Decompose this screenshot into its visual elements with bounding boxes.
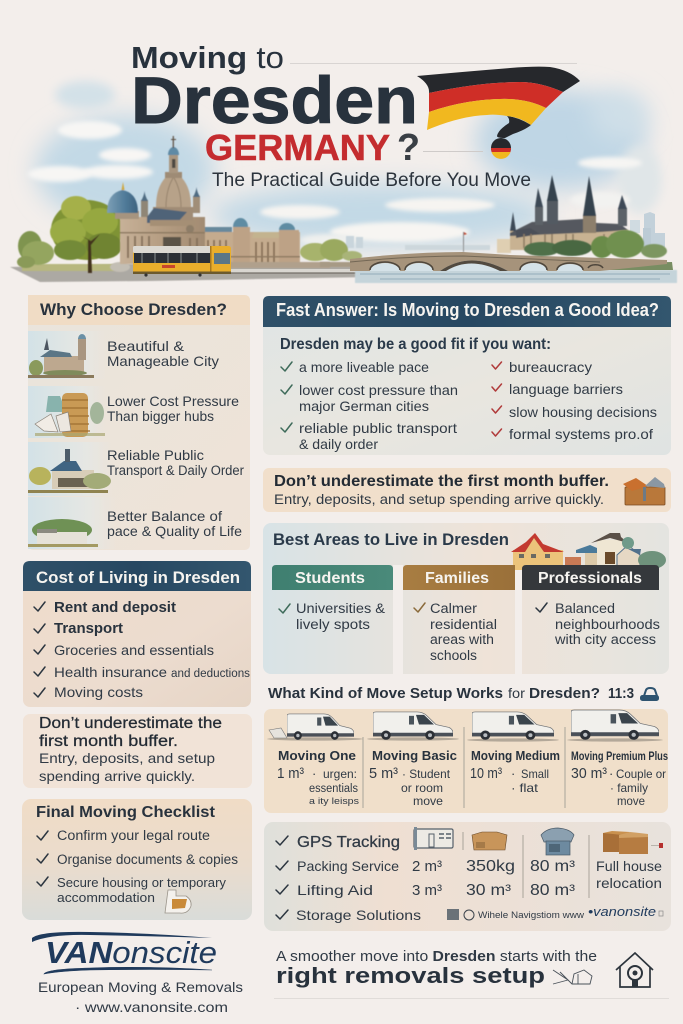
icon: car <box>640 688 659 701</box>
list: costs: and deductions <box>171 668 250 680</box>
panel header <box>23 561 251 591</box>
closing call to action: A smoother move into Dresden starts with the <box>276 949 597 965</box>
panel: why choose Dresden <box>28 295 250 550</box>
table values: volumes: 3 m³ <box>412 882 442 899</box>
callout: first month buffer (left): spending arrive quickly. <box>39 768 195 784</box>
text: item 2 <box>107 393 239 424</box>
text: families: schools <box>430 648 477 663</box>
panel: move sizes <box>264 709 668 813</box>
option: moving basic: move <box>413 794 443 808</box>
heading: move setup: 11:3 <box>608 685 634 702</box>
trees right <box>524 230 667 258</box>
option: moving medium: · flat <box>511 781 539 795</box>
option: moving premium plus: · <box>609 766 613 781</box>
logo url: · www.vanonsite.com <box>75 999 228 1015</box>
thumbnail: public transport <box>28 442 113 496</box>
subtitle: The Practical Guide Before You Move <box>212 169 531 191</box>
option: moving premium plus <box>571 751 668 808</box>
tab: families: Families <box>425 570 489 587</box>
text: item 4: Better Balance of <box>107 508 222 524</box>
footer strip with brand: •vanonsite <box>588 904 656 919</box>
list: services: Lifting Aid <box>297 882 373 898</box>
list: good fit: lower cost pressure than <box>299 382 458 398</box>
callout: first month buffer (right): Entry, deposits, and setup spending arrive quickly. <box>274 491 604 507</box>
option: moving basic: or room <box>401 781 443 795</box>
Frauenkirche and palace <box>107 136 330 268</box>
heading: move setup: for <box>508 685 525 701</box>
list: good fit: & daily order <box>299 436 378 452</box>
panel: services <box>264 822 671 931</box>
text: item 2: Lower Cost Pressure <box>107 393 239 409</box>
option: moving premium plus: · family <box>610 781 648 795</box>
hero illustration: Dresden skyline <box>10 81 677 283</box>
list: services: Storage Solutions <box>296 907 421 923</box>
text: professionals: Balanced <box>555 601 615 616</box>
bridge over the Elbe <box>350 252 667 271</box>
sky watercolor wash <box>28 81 662 247</box>
icon: folder <box>165 890 191 913</box>
list: services: Packing Service <box>297 858 399 874</box>
heading: move setup: What Kind of Move Setup Works <box>268 685 503 702</box>
text: families: Calmer <box>430 601 478 616</box>
heading: Fast Answer: Is Moving to Dresden a Good Idea? <box>276 300 659 320</box>
table values: volumes: relocation <box>596 876 662 891</box>
text: students: Universities & <box>296 601 385 616</box>
option: moving one: a ity leisps <box>309 796 359 807</box>
icon: German flag question mark <box>417 67 580 159</box>
tab: families <box>403 565 515 590</box>
text: professionals <box>536 601 660 647</box>
tab: professionals <box>522 565 659 590</box>
van 1 <box>267 714 363 741</box>
table values: volumes: Full house <box>596 859 662 874</box>
icon: trailer <box>414 827 453 850</box>
panel: cost of living <box>23 561 251 707</box>
option: moving basic <box>369 748 457 808</box>
panel: fast answer <box>263 296 671 455</box>
table values: volumes: 350kg <box>466 858 515 875</box>
title line: GERMANY: GERMANY <box>205 127 390 168</box>
list: checklist: Confirm your legal route <box>57 828 210 843</box>
list: services <box>276 834 421 923</box>
footer strip with brand <box>447 904 663 920</box>
list: good fit: a more liveable pace <box>299 359 429 375</box>
text: item 3: Reliable Public <box>107 447 204 463</box>
option: moving basic: Moving Basic <box>372 748 457 763</box>
table values: volumes <box>412 858 662 899</box>
list: challenges: language barriers <box>509 381 623 397</box>
panel header <box>263 296 671 327</box>
tab: students: Students <box>295 570 365 587</box>
decorative thin line <box>290 63 577 64</box>
list: good fit: reliable public transport <box>299 420 457 436</box>
text: students: lively spots <box>296 617 370 632</box>
heading: Final Moving Checklist <box>36 804 216 821</box>
option: moving medium: · <box>511 766 515 781</box>
icon: house <box>616 953 653 987</box>
option: moving one: Moving One <box>278 748 356 763</box>
panel header <box>28 295 250 325</box>
van 2 <box>367 712 459 741</box>
option: moving basic: · Student <box>402 767 451 781</box>
decorative thin line <box>274 998 669 999</box>
text: item 1 <box>107 338 219 369</box>
text: item 1: Beautiful & <box>107 338 185 354</box>
text: families: residential <box>430 617 497 632</box>
text: item 4 <box>107 508 242 539</box>
right distant towers <box>630 212 665 247</box>
text: students <box>279 601 385 632</box>
icon: moving box <box>623 477 665 505</box>
tram <box>133 246 231 277</box>
castle and cathedral skyline <box>497 175 628 253</box>
text: item 3 <box>107 447 244 478</box>
list: services: GPS Tracking <box>297 834 400 851</box>
option: moving medium <box>470 749 560 795</box>
text: item 2: Than bigger hubs <box>107 408 214 424</box>
list: good fit: major German cities <box>299 398 429 414</box>
logo: VANonscite <box>32 932 243 1015</box>
heading: Best Areas to Live in Dresden <box>273 530 509 549</box>
illustration: houses <box>511 533 666 570</box>
list: good fit <box>281 359 458 452</box>
thumbnail: costs <box>28 386 106 438</box>
icon: squiggle sketch <box>553 970 592 984</box>
text: item 4: pace & Quality of Life <box>107 523 242 539</box>
list: checklist <box>37 828 238 905</box>
list: challenges <box>492 359 657 442</box>
closing call to action <box>276 949 597 988</box>
column gaps <box>393 565 403 674</box>
list: costs <box>34 600 250 700</box>
text: professionals: with city access <box>554 632 656 647</box>
decorative thin line <box>423 151 483 152</box>
midground trees <box>300 232 490 267</box>
title line: Dresden: Dresden <box>131 63 418 137</box>
text: families: areas with <box>430 632 494 647</box>
list: challenges: bureaucracy <box>509 359 592 375</box>
icon: stacked boxes <box>603 831 663 854</box>
callout: first month buffer (right): Don’t underestimate the first month buffer. <box>274 473 609 490</box>
option: moving one: 1 m³ <box>277 765 304 782</box>
van 4 <box>567 710 663 742</box>
list: costs: Health insurance <box>54 664 167 680</box>
option: moving medium: Moving Medium <box>471 749 560 763</box>
list: challenges: formal systems pro.of <box>509 426 653 442</box>
question mark: ? <box>397 127 420 169</box>
option: moving medium: 10 m³ <box>470 765 502 782</box>
callout: first month buffer (left): first month buffer. <box>39 733 178 750</box>
option: moving medium: Small <box>521 767 549 781</box>
option: moving premium plus: 30 m³ <box>571 765 607 782</box>
list: checklist: accommodation <box>57 890 155 905</box>
heading: move setup <box>268 685 659 702</box>
list: costs: Moving costs <box>54 684 143 700</box>
option: moving one <box>277 748 359 807</box>
table values: volumes: 80 m³ <box>530 882 575 899</box>
title line: Moving to: Moving to <box>131 40 284 75</box>
option: moving one: urgen: <box>323 769 357 781</box>
footer strip with brand: Wihele Navigstiom www <box>478 910 585 920</box>
callout: first month buffer (right) <box>263 468 671 512</box>
icon: parcel <box>472 832 507 850</box>
table values: volumes: 2 m³ <box>412 858 442 875</box>
panel: best areas <box>263 523 669 674</box>
closing call to action: right removals setup <box>276 963 545 988</box>
list: costs: Groceries and essentials <box>54 642 214 658</box>
table values: volumes: 30 m³ <box>466 882 511 899</box>
tab: professionals: Professionals <box>538 570 642 587</box>
text: professionals: neighbourhoods <box>555 617 660 632</box>
heading: move setup: Dresden? <box>529 685 600 702</box>
option: moving one: essentials <box>309 783 358 795</box>
logo: VANonscite: VANonscite <box>45 935 217 970</box>
option: moving basic: 5 m³ <box>369 765 398 782</box>
title block <box>131 40 577 191</box>
subheading: Dresden may be a good fit if you want: <box>280 336 551 353</box>
ground and river <box>10 262 677 283</box>
list: checklist: Organise documents & copies <box>57 852 238 867</box>
list: costs: Transport <box>54 621 123 637</box>
list: challenges: slow housing decisions <box>509 404 657 420</box>
table values: volumes: 80 m³ <box>530 858 575 875</box>
van 3 <box>467 712 559 742</box>
heading: Why Choose Dresden? <box>40 300 227 319</box>
list: checklist: Secure housing or temporary <box>57 875 226 890</box>
option: moving premium plus: move <box>617 794 645 808</box>
heading: Cost of Living in Dresden <box>36 568 240 587</box>
tab: students <box>272 565 393 590</box>
panel: final moving checklist <box>22 799 252 920</box>
option: moving one: · <box>312 766 316 781</box>
text: families <box>414 601 497 663</box>
icon: storage chest <box>541 828 574 855</box>
callout: first month buffer (left): Don’t underestimate the <box>39 715 222 732</box>
text: item 1: Manageable City <box>107 353 219 369</box>
option: moving premium plus: Couple or <box>616 767 666 781</box>
logo tagline: European Moving & Removals <box>38 979 243 995</box>
list: costs: Rent and deposit <box>54 600 176 616</box>
callout: first month buffer (left): Entry, deposits, and setup <box>39 750 215 766</box>
thumbnail: quality of life <box>28 497 116 549</box>
callout: first month buffer (left) <box>23 714 252 788</box>
text: item 3: Transport & Daily Order <box>107 463 244 478</box>
thumbnail: city <box>28 331 106 379</box>
trees left <box>17 196 130 273</box>
